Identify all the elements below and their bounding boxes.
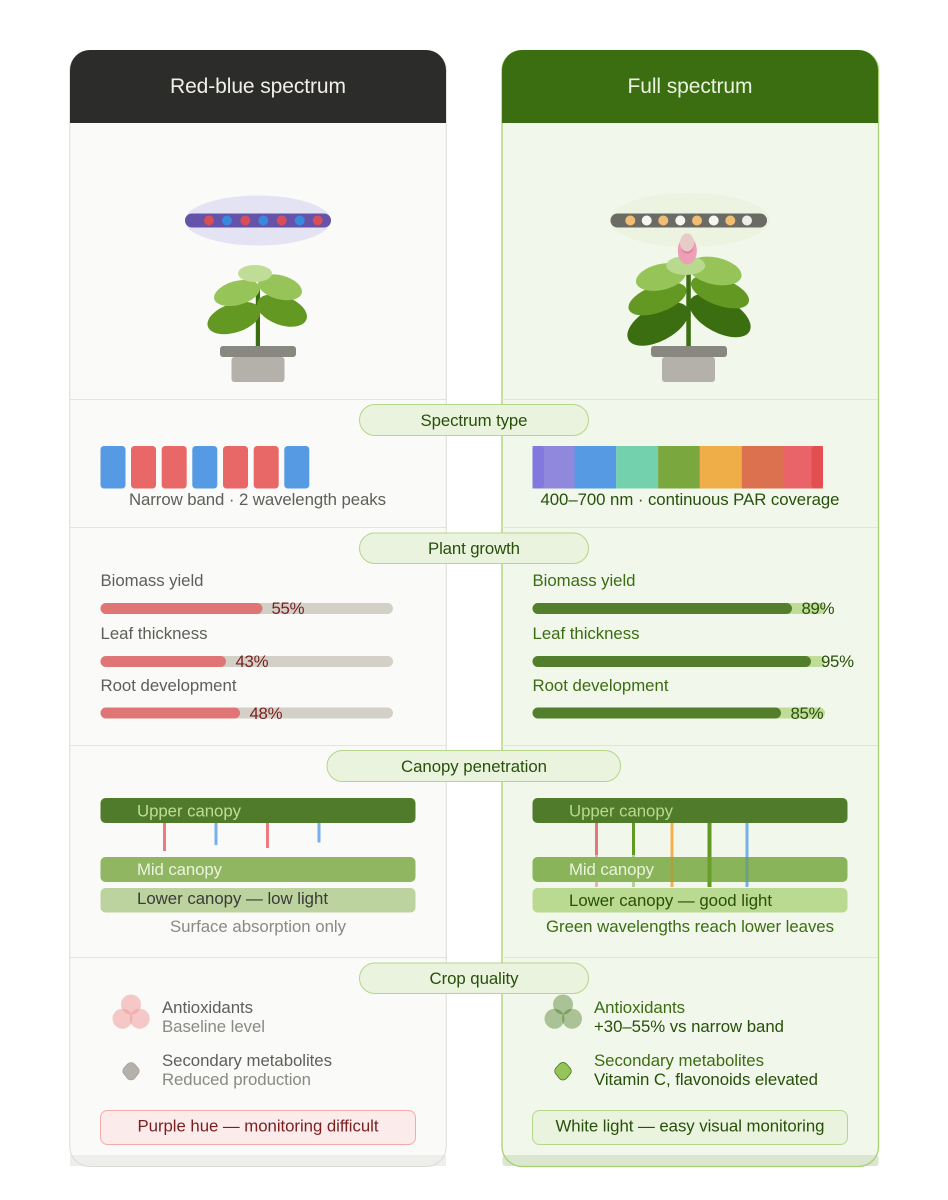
pill: crop quality — [360, 963, 588, 994]
header: full spectrum — [502, 50, 878, 123]
icon: grey metabolite diamond — [123, 1062, 139, 1080]
icon: green metabolite diamond — [555, 1062, 571, 1080]
illustration: red-blue lamp — [185, 196, 331, 246]
canopy diagram: full spectrum: Lower canopy — good light — [569, 891, 772, 910]
caption: green wavelengths: Green wavelengths reach lower leaves — [546, 917, 834, 936]
icon: pale antioxidant circles — [112, 994, 150, 1029]
callout: white light — [532, 1110, 848, 1144]
quality list: full spectrum: Vitamin C, flavonoids elevated — [594, 1070, 818, 1089]
header: red-blue spectrum: Red-blue spectrum — [170, 75, 346, 98]
caption: narrow band: Narrow band · 2 wavelength peaks — [129, 490, 386, 509]
growth bars: red-blue: Root development — [100, 676, 237, 695]
growth bars: full spectrum: 95% — [821, 652, 854, 671]
quality list: full spectrum — [544, 994, 818, 1089]
growth bars: full spectrum: Biomass yield — [532, 571, 636, 590]
quality list: full spectrum: +30–55% vs narrow band — [594, 1017, 784, 1036]
quality list: full spectrum: Secondary metabolites — [594, 1051, 764, 1070]
pill: plant growth: Plant growth — [428, 539, 520, 558]
canopy diagram: full spectrum: Upper canopy — [569, 802, 674, 820]
illustration: larger flowering plant in pot — [620, 234, 758, 382]
canopy diagram: red-blue: Lower canopy — low light — [137, 889, 328, 908]
canopy diagram: red-blue: Upper canopy — [137, 802, 242, 820]
header: red-blue spectrum — [70, 50, 446, 123]
spectrum bands: narrow — [100, 446, 309, 488]
header: full spectrum: Full spectrum — [628, 75, 752, 98]
illustration: smaller plant in pot — [203, 265, 311, 382]
callout: purple hue — [100, 1110, 416, 1144]
growth bars: red-blue — [100, 571, 393, 723]
caption: continuous coverage: 400–700 nm · continuous PAR coverage — [540, 490, 840, 509]
pill: spectrum type: Spectrum type — [420, 411, 528, 430]
pill: spectrum type — [360, 404, 588, 436]
growth bars: red-blue: Biomass yield — [100, 571, 204, 590]
callout: purple hue: Purple hue — monitoring difficult — [138, 1116, 379, 1136]
panel: full spectrum — [502, 50, 878, 1166]
growth bars: red-blue: Leaf thickness — [100, 624, 208, 643]
pill: crop quality: Crop quality — [430, 969, 519, 988]
icon: green antioxidant circles — [544, 994, 582, 1029]
quality list: red-blue — [112, 994, 332, 1089]
canopy diagram: red-blue: Mid canopy — [137, 860, 223, 879]
illustration: full spectrum lamp — [610, 193, 770, 247]
growth bars: full spectrum: Leaf thickness — [532, 624, 640, 643]
pill: plant growth — [360, 533, 588, 564]
spectrum bands: continuous — [532, 446, 823, 488]
growth bars: full spectrum: Root development — [532, 676, 669, 695]
growth bars: full spectrum — [532, 571, 854, 723]
growth bars: full spectrum: 85% — [790, 704, 824, 723]
callout: white light: White light — easy visual monitoring — [556, 1116, 824, 1136]
pill: canopy penetration: Canopy penetration — [401, 757, 547, 776]
pill: canopy penetration — [327, 750, 620, 782]
panel: red-blue spectrum — [70, 50, 446, 1166]
quality list: red-blue: Baseline level — [162, 1017, 265, 1036]
caption: surface absorption: Surface absorption only — [170, 917, 347, 936]
growth bars: full spectrum: 89% — [802, 599, 835, 618]
canopy diagram: red-blue — [100, 798, 416, 912]
quality list: red-blue: Reduced production — [162, 1070, 311, 1089]
growth bars: red-blue: 55% — [272, 599, 305, 618]
canopy diagram: full spectrum: Mid canopy — [569, 860, 655, 879]
canopy diagram: full spectrum — [532, 798, 848, 912]
quality list: full spectrum: Antioxidants — [594, 998, 685, 1017]
quality list: red-blue: Antioxidants — [162, 998, 253, 1017]
quality list: red-blue: Secondary metabolites — [162, 1051, 332, 1070]
growth bars: red-blue: 48% — [250, 704, 283, 723]
growth bars: red-blue: 43% — [236, 652, 269, 671]
